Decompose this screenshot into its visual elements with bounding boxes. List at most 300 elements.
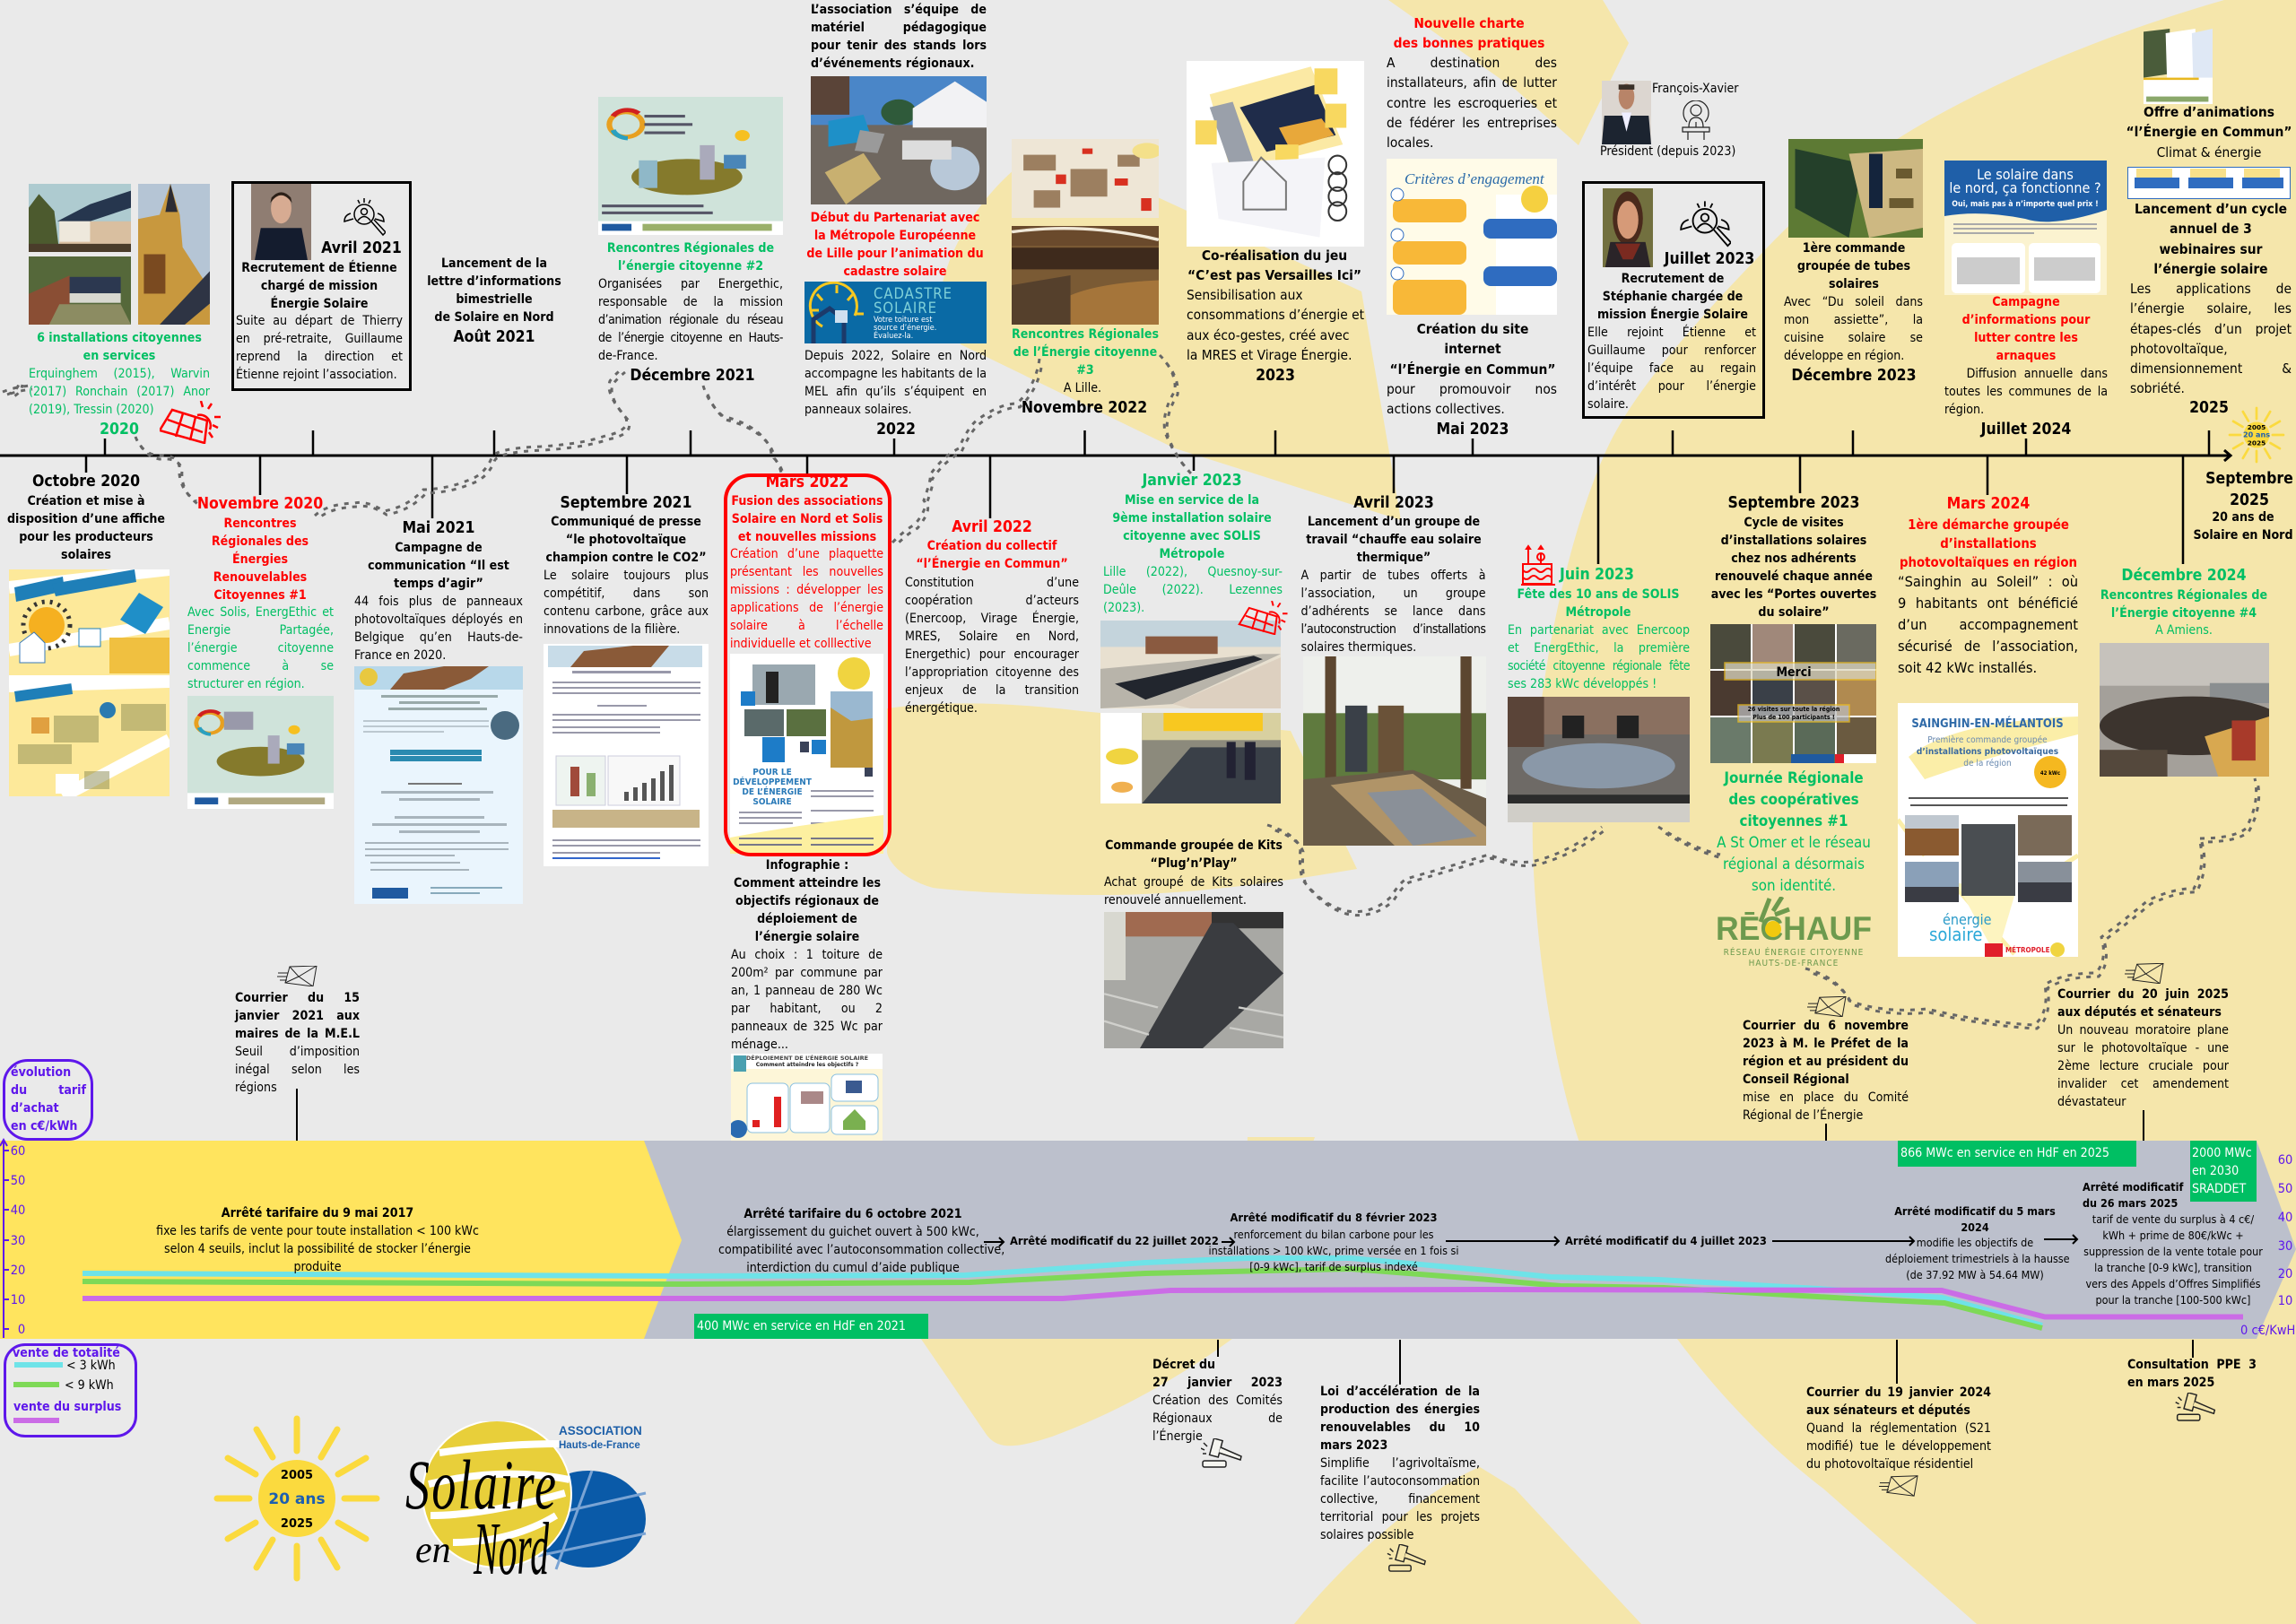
heading: 6 installations	[37, 331, 202, 363]
text: collectif: (Enercoop, Virage Énergie,	[905, 612, 1079, 626]
heading: arrete 26 mars 2025: du 26 mars 2025	[2083, 1196, 2178, 1210]
image: visites	[1710, 624, 1876, 763]
axis: left tarif axis: 40	[11, 1203, 25, 1218]
logo: 20 ans sun: 2005	[281, 1469, 313, 1482]
chart: tarifs lines	[0, 1141, 2296, 1339]
heading: Co-realisation	[1187, 248, 1361, 283]
text: A Amiens: A Amiens.	[2155, 623, 2213, 638]
date: Novembre 2020: Novembre 2020	[197, 495, 323, 513]
photo: ferme solaire	[29, 256, 131, 325]
image: cadastre solaire	[804, 282, 987, 343]
axis: right labels	[2233, 1148, 2296, 1341]
text: courrier 19 janvier: Quand la réglementation (S21	[1806, 1420, 1991, 1435]
text: evolution du tarif: évolution	[11, 1065, 71, 1080]
text: Stephanie: solaire.	[1587, 397, 1629, 412]
image: plaquette: POUR LE	[752, 768, 792, 777]
axis: left tarif axis: 50	[11, 1174, 25, 1188]
heading: lettre d'informations: de Solaire en Nord	[434, 310, 554, 325]
logo: Solaire en Nord: Hauts-de-France	[559, 1440, 640, 1451]
text: arrete 9 mai 2017: fixe les tarifs de vente pour toute installation < 100 kWc	[156, 1224, 479, 1238]
heading: chauffe eau: thermique”	[1357, 551, 1431, 565]
text: collectif: enjeux de la transition	[905, 683, 1079, 698]
text: journee regionale: A St Omer et le réseau	[1717, 833, 1871, 851]
axis: right labels: 30	[2278, 1239, 2292, 1254]
heading: campagne	[1936, 293, 2116, 365]
text: Plug'n'Play: Achat groupé de Kits solaires	[1104, 875, 1283, 890]
text: arrete 26 mars 2025: vers des Appels d’Offres Simplifiés	[2085, 1277, 2261, 1290]
text: jeu: la MRES et Virage Énergie.	[1187, 347, 1352, 363]
text: installations: Erquinghem (2015), Warvin	[29, 367, 210, 381]
label: 2000 MWc: en 2030	[2192, 1164, 2239, 1178]
text: 9eme installation: (2023).	[1103, 601, 1144, 615]
heading: chauffe eau: travail “chauffe eau solaire	[1306, 533, 1482, 547]
callout: legend	[4, 1343, 137, 1437]
heading: Il est temps d'agir: Campagne de	[395, 541, 483, 555]
text: tubes: Avec “Du soleil dans	[1784, 295, 1923, 309]
text: 9eme installation: Deûle (2022). Lezennes	[1103, 583, 1283, 597]
text: Sainghin: 9 habitants ont bénéficié	[1898, 595, 2078, 612]
text: courrier 6 novembre: mise en place du Comité	[1743, 1090, 1909, 1105]
heading: courrier 15 janvier	[235, 989, 360, 1043]
heading: l'Energie en Commun: “l’Énergie en Commun”	[916, 557, 1068, 571]
heading: chauffe eau: Lancement d’un groupe de	[1308, 515, 1480, 529]
text: journee regionale	[1704, 831, 1883, 896]
date: Mars 2024: Mars 2024	[1947, 495, 2030, 513]
heading: 9eme installation	[1102, 491, 1282, 563]
callout: evolution du tarif	[3, 1059, 93, 1141]
text: fusion: missions : développer les	[730, 583, 883, 597]
text: jeu	[1187, 287, 1364, 363]
icon: red solar panel	[1238, 601, 1290, 635]
text: infographie	[731, 946, 883, 1054]
heading: Co-realisation: “C’est pas Versailles Ici”	[1187, 267, 1361, 283]
heading: infographie: objectifs régionaux de	[735, 894, 879, 908]
heading: materiel pedagogique: matériel pédagogique	[811, 21, 987, 35]
text: Il est temps: 44 fois plus de panneaux	[354, 595, 523, 609]
text: webinaires: Les applications de	[2130, 281, 2292, 297]
text: decret: l’Énergie	[1152, 1429, 1203, 1444]
image: criteres d'engagement: Critères d’engagement	[1405, 170, 1545, 187]
heading: courrier 20 juin: Courrier du 20 juin 2025	[2057, 987, 2229, 1002]
text: arrete 26 mars 2025: tarif de vente du surplus à 4 c€/	[2092, 1212, 2254, 1225]
text: arrete 8 fevrier 2023: installations > 100 kWc, prime versée en 1 fois si	[1208, 1244, 1459, 1257]
image: infographie deploiement: Comment atteindre les objectifs ?	[756, 1062, 859, 1068]
text: Il est temps: Belgique qu’en Hauts-de-	[354, 630, 523, 645]
text: 9eme installation	[1103, 563, 1283, 617]
text: communique: Le solaire toujours plus	[544, 569, 709, 583]
image: Sainghin poster: solaire	[1929, 924, 1982, 945]
text: communique: contenu carbone, grâce aux	[544, 604, 709, 619]
heading: offre d'animations: “l’Énergie en Commun”	[2126, 124, 2292, 140]
text: arrete 8 fevrier 2023	[1199, 1227, 1468, 1275]
text: decret: Régionaux de	[1152, 1411, 1283, 1426]
heading: loi acceleration: mars 2023	[1320, 1438, 1387, 1453]
heading: Plug'n'Play: “Plug’n’Play”	[1150, 856, 1238, 871]
axis: left tarif axis: 0	[18, 1323, 25, 1337]
heading: webinaires: l’énergie solaire	[2153, 261, 2268, 277]
icon: gavel decret	[1201, 1438, 1242, 1468]
heading: Rencontres #3: #3	[1076, 363, 1094, 378]
text: evolution du tarif: d’achat	[11, 1101, 59, 1116]
text: charte: installateurs, afin de lutter	[1387, 74, 1557, 91]
text: infographie: ménage...	[731, 1038, 788, 1052]
heading: Rencontres #1: Régionales des	[212, 534, 309, 549]
legend entries	[0, 1343, 144, 1438]
heading: demarche groupee	[1899, 515, 2078, 572]
text: arrete 5 mars 2024: (de 37.92 MW à 54.64 MW)	[1906, 1268, 2044, 1281]
text: charte: locales.	[1387, 135, 1433, 151]
heading: site internet	[1390, 321, 1555, 378]
heading: 10 ans SOLIS	[1509, 585, 1688, 621]
text: charte: de fédérer les entreprises	[1387, 115, 1557, 131]
text: tubes: développe en région.	[1784, 349, 1904, 363]
label: 400 MWc	[694, 1314, 928, 1339]
text: Plug'n'Play	[1104, 873, 1283, 909]
image: Sainghin poster: de la région	[1963, 758, 2012, 769]
photo: toiture Lille	[1100, 621, 1281, 708]
text: courrier 20 juin: dévastateur	[2057, 1095, 2126, 1109]
heading: Rencontres #4	[2094, 586, 2274, 622]
date: Mai 2021: Mai 2021	[402, 519, 474, 537]
text: tubes: mon assiette”, la	[1784, 313, 1923, 327]
text: Etienne	[236, 314, 403, 382]
heading: portes ouvertes: du solaire”	[1758, 605, 1830, 620]
text: courrier 15 janvier: régions	[235, 1081, 277, 1095]
heading: journee regionale: Journée Régionale	[1724, 769, 1864, 786]
date: Avril 2021: Avril 2021	[321, 239, 402, 257]
text: chauffe eau: solaires thermiques.	[1300, 640, 1416, 655]
text: chauffe eau	[1300, 567, 1485, 656]
text: Rencontres #1	[187, 604, 334, 693]
heading: partenariat MEL: la Métropole Européenne	[814, 229, 976, 243]
text: decret: Création des Comités	[1152, 1394, 1283, 1408]
text: fusion: Création d’une plaquette	[730, 547, 883, 561]
axis: left tarif axis: 20	[11, 1264, 25, 1278]
heading: campagne: Campagne	[1992, 295, 2060, 309]
heading: partenariat MEL	[806, 211, 984, 279]
text: 10 ans SOLIS: En partenariat avec Enercoop	[1508, 622, 1690, 637]
text: tubes	[1784, 295, 1923, 363]
image: cadastre solaire: SOLAIRE	[874, 300, 937, 317]
heading: chauffe eau	[1304, 513, 1483, 567]
text: arrete 26 mars 2025	[2083, 1211, 2263, 1307]
image: Sainghin poster: 42 kWc	[2040, 770, 2060, 777]
text: Rencontres #1: Energie Partagée,	[187, 623, 334, 638]
text: chauffe eau: A partir de tubes offerts à	[1300, 569, 1485, 583]
heading: affiche: disposition d’une affiche	[7, 512, 165, 526]
heading: portes ouvertes: renouvelé chaque année	[1715, 569, 1873, 584]
logo: Solaire en Nord	[399, 1421, 655, 1592]
text: infographie: 200m² par commune par	[731, 966, 883, 980]
heading: courrier 19 janvier: aux sénateurs et députés	[1806, 1403, 1970, 1417]
text: collectif: MRES, Solaire en Nord,	[905, 630, 1079, 644]
text: fusion: individuelle et colllective	[730, 637, 872, 651]
image: Sainghin poster: énergie	[1943, 911, 1992, 928]
text: arrete 8 fevrier 2023: renforcement du bilan carbone pour les	[1233, 1228, 1434, 1241]
logo: 20 ans sun: 2025	[281, 1517, 313, 1531]
heading: portes ouvertes	[1704, 514, 1883, 621]
heading: affiche: pour les producteurs	[19, 530, 153, 544]
text: 9eme installation: Lille (2022), Quesnoy-sur-	[1103, 565, 1283, 579]
heading: decret	[1152, 1356, 1283, 1392]
heading: infographie: Comment atteindre les	[734, 876, 881, 890]
heading: tubes solaires: groupée de tubes	[1797, 259, 1910, 274]
heading: courrier 6 novembre: région et au président du	[1743, 1055, 1909, 1069]
text: Rencontres #2: de l’énergie citoyenne en Hauts-	[598, 331, 783, 345]
text: chauffe eau: l’autoconstruction d’installations	[1300, 622, 1485, 637]
text: courrier 19 janvier: du photovoltaïque résidentiel	[1806, 1456, 1973, 1471]
text: arrete 26 mars 2025: suppression de la vente totale pour	[2083, 1245, 2263, 1257]
legend entries: < 9 kWh	[65, 1378, 114, 1393]
image: visites: 26 visites sur toute la région	[1748, 706, 1839, 713]
heading: decret: 27 janvier 2023	[1152, 1376, 1283, 1390]
heading: Il est temps d'agir	[358, 539, 519, 593]
text: cadastre: accompagne les habitants de la	[804, 367, 987, 381]
text: Il est temps: photovoltaïques déployés en	[354, 612, 523, 627]
text: journee regionale: régional a désormais	[1723, 855, 1865, 873]
text: Stephanie: d’intérêt pour l’énergie	[1587, 379, 1756, 394]
heading: Recrutement Etienne	[241, 260, 397, 311]
text: infographie: an, 1 panneau de 280 Wc	[731, 984, 883, 998]
text: jeu: aux éco-gestes, créé avec	[1187, 327, 1349, 343]
text: Septembre 2025	[2205, 468, 2294, 511]
date: Septembre 2023: Septembre 2023	[1728, 494, 1859, 512]
heading: 9eme installation: citoyenne avec SOLIS	[1123, 529, 1261, 543]
text: charte	[1387, 55, 1557, 151]
icon: gavel loi	[1386, 1544, 1428, 1572]
heading: offre d'animations	[2119, 102, 2296, 143]
heading: affiche: Création et mise à	[27, 494, 145, 508]
image: cadastre solaire: Évaluez-la.	[874, 330, 913, 341]
text: Etienne: reprend la direction et	[236, 350, 403, 364]
image: Sainghin poster: SAINGHIN-EN-MÉLANTOIS	[1911, 716, 2064, 731]
text: site: pour promouvoir nos	[1387, 381, 1557, 397]
text: arrete 26 mars 2025: la tranche [0-9 kWc], transition	[2094, 1261, 2252, 1273]
text: fusion	[730, 546, 883, 653]
text: arrete 26 mars 2025: kWh + prime de 80€/kWc +	[2102, 1229, 2244, 1241]
text: Francois-Xavier: François-Xavier	[1652, 82, 1739, 96]
heading: site internet: “l’Énergie en Commun”	[1390, 361, 1555, 378]
text: President: Président (depuis 2023)	[1600, 144, 1735, 159]
heading: loi acceleration: Loi d’accélération de la	[1320, 1385, 1480, 1399]
date: Mars 2022: Mars 2022	[766, 473, 848, 491]
heading: courrier 20 juin: aux députés et sénateurs	[2057, 1005, 2222, 1020]
text: courrier 20 juin: invalider cet amendement	[2057, 1077, 2229, 1091]
text: evolution du tarif: en c€/kWh	[11, 1119, 77, 1133]
text: courrier 20 juin	[2057, 1021, 2229, 1111]
text: cadastre: panneaux solaires.	[804, 403, 912, 417]
heading: arrete 9 mai 2017: Arrêté tarifaire du 9 mai 2017	[222, 1206, 413, 1220]
heading: portes ouvertes: chez nos adhérents	[1731, 551, 1857, 566]
heading: arrete 5 mars 2024	[1885, 1203, 2065, 1236]
logo: Solaire en Nord: Nord	[473, 1507, 549, 1591]
image: jeu C'est pas Versailles	[1187, 61, 1364, 247]
heading: journee regionale	[1704, 767, 1883, 831]
text: Sainghin: “Sainghin au Soleil” : où	[1898, 573, 2078, 590]
axis: right labels: 50	[2278, 1182, 2292, 1196]
image: infographie deploiement	[731, 1054, 883, 1141]
text: evolution du tarif	[11, 1064, 86, 1135]
icon: small 20 ans sun: 2005	[2248, 423, 2266, 431]
text: courrier 19 janvier	[1806, 1419, 1991, 1472]
photo: chauffe eau	[1303, 656, 1486, 846]
text: fusion: présentant les nouvelles	[730, 565, 883, 579]
heading: tubes solaires: 1ère commande	[1803, 241, 1905, 256]
text: Rencontres #2: Organisées par Energethic,	[598, 277, 783, 291]
heading: arrete 26 mars 2025: Arrêté modificatif	[2083, 1180, 2183, 1194]
image: campagne arnaques: Oui, mais pas à n’importe quel prix !	[1952, 200, 2099, 209]
heading: Rencontres #3: de l’Énergie citoyenne	[1013, 345, 1157, 360]
text: installations	[29, 367, 210, 417]
text: infographie: Au choix : 1 toiture de	[731, 948, 883, 962]
text: collectif: coopération d’acteurs	[905, 594, 1079, 608]
heading: infographie	[726, 856, 888, 946]
text: arrete 9 mai 2017	[138, 1222, 497, 1276]
heading: infographie: déploiement de	[757, 912, 857, 926]
heading: infographie: l’énergie solaire	[755, 930, 859, 944]
text: Sainghin: sécurisé de l’association,	[1898, 638, 2078, 655]
text: arrete 9 mai 2017: produite	[293, 1260, 342, 1274]
heading: partenariat MEL: Début du Partenariat avec	[811, 211, 979, 225]
heading: Il est temps d'agir: communication “Il est	[368, 559, 509, 573]
image: communique mai 2021	[354, 666, 523, 904]
heading: journee regionale: des coopératives	[1728, 790, 1859, 808]
logo: Solaire en Nord: Solaire	[405, 1446, 556, 1524]
heading: partenariat MEL: cadastre solaire	[844, 265, 946, 279]
panel: Mars 2022 frame	[724, 473, 891, 856]
text: Sainghin	[1898, 571, 2078, 679]
text: campagne: toutes les communes de la	[1944, 385, 2108, 399]
text: Rencontres #2: responsable de la mission	[598, 295, 783, 309]
heading: campagne: d’informations pour	[1962, 313, 2090, 327]
text: jeu: consommations d’énergie et	[1187, 307, 1364, 323]
text: Etienne: Suite au départ de Thierry	[236, 314, 403, 328]
heading: portes ouvertes: avec les “Portes ouvertes	[1711, 587, 1876, 602]
text: webinaires: l’énergie solaire, les	[2130, 300, 2292, 317]
icon: envelope 19 janvier	[1879, 1475, 1918, 1497]
axis: left tarif axis: 10	[11, 1293, 25, 1307]
legend entries: < 3 kWh	[66, 1359, 116, 1373]
text: climat: Climat & énergie	[2157, 144, 2261, 161]
heading: courrier 6 novembre	[1743, 1017, 1909, 1089]
heading: Rencontres #2	[607, 241, 774, 274]
heading: materiel pedagogique: d’événements régionaux.	[811, 56, 974, 71]
heading: lettre d'informations: bimestrielle	[456, 292, 533, 307]
photo: stands	[811, 76, 987, 204]
heading: arrete 5 mars 2024: 2024	[1961, 1220, 1989, 1234]
heading: courrier 6 novembre: Courrier du 6 novembre	[1743, 1019, 1909, 1033]
heading: portes ouvertes: d’installations solaires	[1721, 534, 1866, 548]
text: charte: A destination des	[1387, 55, 1557, 71]
heading: courrier 19 janvier: Courrier du 19 janvier 2024	[1806, 1385, 1991, 1399]
text: loi acceleration: solaires possible	[1320, 1528, 1413, 1542]
text: webinaires: photovoltaïque,	[2130, 341, 2228, 357]
icon: envelope 20 juin	[2125, 963, 2164, 984]
text: courrier 15 janvier: inégal selon les	[235, 1063, 360, 1077]
stems: below band and courriers	[0, 1085, 2296, 1390]
heading: portes ouvertes: Cycle de visites	[1744, 516, 1844, 530]
photo: Stephanie	[1603, 188, 1653, 267]
heading: tubes solaires	[1797, 241, 1910, 291]
text: campagne: région.	[1944, 403, 1984, 417]
icon: envelope 6 novembre	[1807, 996, 1847, 1017]
logo: 20 ans sun	[212, 1413, 382, 1584]
label: 866 MWc	[1898, 1141, 2136, 1167]
photo: kits solaires	[1104, 912, 1283, 1048]
image: Rencontres #2	[598, 97, 783, 235]
heading: 10 ans SOLIS: Fête des 10 ans de SOLIS	[1518, 586, 1679, 601]
text: Stephanie: Elle rejoint Étienne et	[1587, 326, 1756, 340]
image: cadastre solaire: Votre toiture est	[874, 316, 932, 325]
text: Il est temps	[354, 593, 523, 664]
text: courrier 19 janvier: modifié) tue le développement	[1806, 1438, 1991, 1453]
panel: Avril 2021 frame	[231, 181, 412, 391]
label: 2000 MWc: 2000 MWc	[2192, 1146, 2252, 1160]
image: Sainghin poster: d’installations photovoltaïques	[1917, 747, 2058, 757]
text: arrete 26 mars 2025: pour la tranche [100-500 kWc]	[2096, 1293, 2250, 1306]
heading: Rencontres #1: Renouvelables	[213, 570, 307, 585]
heading: 9eme installation: 9ème installation solaire	[1112, 511, 1272, 525]
date: 2020: 2020	[100, 421, 139, 439]
image: Sainghin poster: MÉTROPOLE	[2005, 944, 2050, 954]
heading: Nouvelle charte	[1394, 15, 1544, 51]
label: 866 MWc: 866 MWc en service en HdF en 2025	[1900, 1146, 2109, 1160]
label: 2000 MWc	[2190, 1141, 2257, 1202]
text: chauffe eau: d’adhérents se lance dans	[1300, 604, 1485, 619]
image: cadastre solaire: CADASTRE	[874, 285, 952, 302]
heading: consultation PPE: en mars 2025	[2127, 1376, 2214, 1390]
text: Stephanie: Guillaume pour renforcer	[1587, 343, 1756, 358]
heading: communique de presse	[545, 513, 707, 567]
icon: small 20 ans sun	[2228, 406, 2285, 464]
heading: site internet: Création du site	[1417, 321, 1528, 337]
heading: l'Energie en Commun: Création du collectif	[927, 539, 1057, 553]
text: 10 ans SOLIS	[1508, 621, 1690, 692]
heading: 20 ans: Solaire en Nord	[2193, 528, 2293, 543]
heading: consultation PPE: Consultation PPE 3	[2127, 1358, 2257, 1372]
text: campagne	[1944, 365, 2108, 419]
date: Avril 2022: Avril 2022	[952, 518, 1032, 536]
heading: arrete 6 octobre 2021: Arrêté tarifaire du 6 octobre 2021	[744, 1207, 962, 1221]
text: campagne: Diffusion annuelle dans	[1967, 367, 2108, 381]
text: cadastre: Depuis 2022, Solaire en Nord	[804, 349, 987, 363]
heading: journee regionale: citoyennes #1	[1740, 812, 1848, 829]
text: fusion: applications de l’énergie	[730, 601, 883, 615]
text: Sainghin: soit 42 kWc installés.	[1898, 659, 2037, 676]
legend entries: vente du surplus	[13, 1400, 121, 1414]
date: Novembre 2022: Novembre 2022	[1022, 399, 1147, 417]
heading: webinaires: Lancement d’un cycle	[2135, 201, 2287, 217]
text: charte: contre les escroqueries et	[1387, 95, 1557, 111]
icon: small 20 ans sun: 2025	[2248, 439, 2266, 447]
heading: communique de presse: “le photovoltaïque	[566, 533, 686, 547]
date: Mai 2023: Mai 2023	[1437, 421, 1509, 439]
heading: fusion: Solaire en Nord et Solis	[732, 511, 883, 525]
heading: lettre d'informations: lettre d’informations	[427, 274, 561, 289]
image: plaquette	[730, 654, 883, 854]
text: collectif: énergétique.	[905, 701, 978, 716]
heading: materiel pedagogique: L’association s’équipe de	[811, 3, 987, 17]
photo: eglise	[138, 184, 210, 325]
text: collectif: Energethic) pour encourager	[905, 647, 1079, 662]
text: A Lille: A Lille.	[1064, 381, 1101, 395]
heading: courrier 15 janvier: janvier 2021 aux	[235, 1009, 360, 1023]
text: webinaires	[2130, 279, 2292, 399]
logo: Solaire en Nord: ASSOCIATION	[559, 1424, 642, 1437]
heading: Recrutement Etienne: chargé de mission	[261, 279, 378, 293]
image: plaquette: DE L’ÉNERGIE	[742, 786, 803, 797]
heading: affiche: solaires	[61, 548, 111, 562]
